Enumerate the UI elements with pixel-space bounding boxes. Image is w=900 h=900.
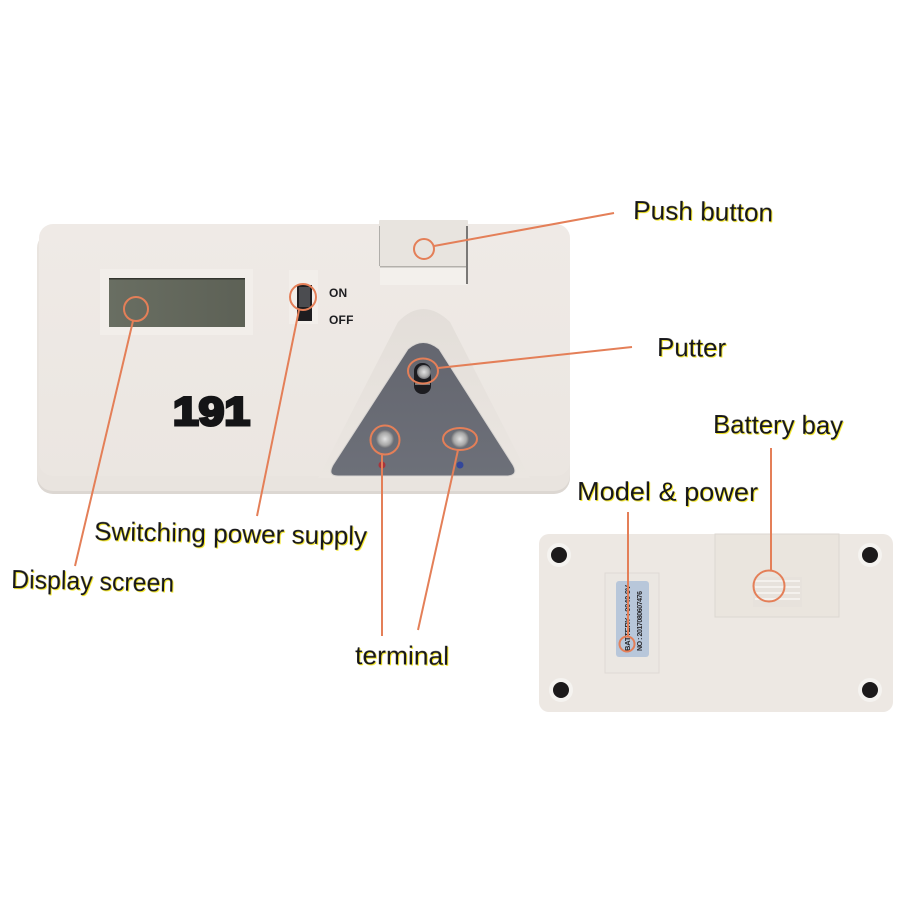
rear panel of tester	[539, 534, 893, 712]
putter screw	[414, 363, 431, 394]
triangular terminal plate	[318, 309, 530, 478]
callout: putter: Putter	[657, 332, 727, 363]
power switch: OFF	[329, 313, 354, 327]
callout: battery bay: Battery bay	[713, 409, 843, 440]
left terminal screw	[376, 430, 394, 448]
display screen	[100, 269, 253, 335]
rating sticker	[605, 573, 659, 673]
callout: switching power supply: Switching power supply	[94, 516, 367, 551]
right terminal screw	[451, 430, 469, 448]
blue terminal dot	[456, 462, 464, 468]
callout: terminal	[355, 426, 477, 671]
power switch	[289, 270, 354, 327]
battery bay cover	[715, 534, 839, 617]
model number 191: 191	[173, 390, 250, 434]
rating sticker: BATTERY : 0040 9V	[623, 585, 632, 651]
callout: model and power: Model & power	[577, 476, 758, 507]
front panel of tester	[37, 220, 570, 494]
callout: model and power	[577, 476, 758, 652]
corner holes	[549, 545, 880, 700]
callout: display screen	[11, 297, 175, 598]
red terminal dot	[378, 462, 386, 468]
callout: push button	[414, 195, 773, 259]
callout: switching power supply	[94, 284, 367, 551]
power switch: ON	[329, 286, 347, 300]
callout: putter	[408, 332, 727, 384]
callout: terminal: terminal	[355, 640, 449, 671]
push button	[379, 220, 468, 285]
callout: battery bay	[713, 409, 843, 602]
callout: display screen: Display screen	[11, 564, 175, 598]
callout: push button: Push button	[633, 195, 773, 227]
rating sticker: NO : 2017080607476	[637, 591, 644, 651]
